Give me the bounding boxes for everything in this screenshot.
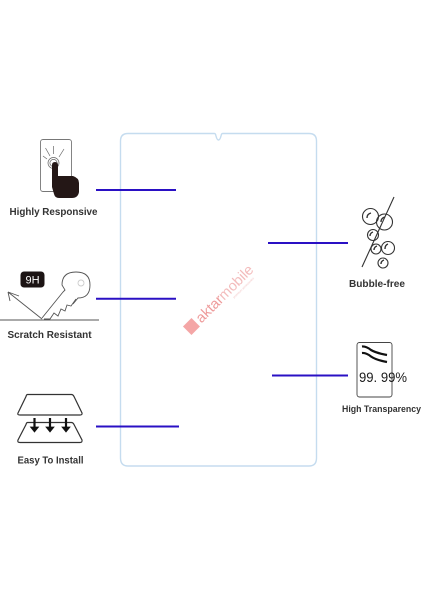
- icon: transparency card: 99. 99%: [359, 369, 407, 385]
- watermark: aktarmobile: premium accessories: [232, 276, 255, 299]
- label: scratch resistant: Scratch Resistant: [8, 330, 92, 341]
- connector line: scratch resistant: [96, 298, 176, 300]
- label: easy to install: Easy To Install: [18, 456, 84, 466]
- icon: 9H badge: 9H: [25, 274, 40, 286]
- connector line: easy to install: [96, 426, 179, 428]
- connector line: high transparency: [272, 374, 348, 376]
- connector line: highly responsive: [96, 189, 176, 191]
- connector line: bubble-free: [268, 242, 348, 244]
- label: highly responsive: Highly Responsive: [10, 207, 98, 218]
- icon: scratch arrow and key: [0, 272, 99, 320]
- icon: install layers: [18, 394, 82, 442]
- icon: transparency card: [357, 342, 407, 397]
- icon: bubbles with diagonal line: [362, 197, 394, 268]
- watermark: aktarmobile: aktarmobile: [193, 262, 257, 326]
- icon: touch finger on phone: [40, 140, 79, 198]
- label: bubble-free: Bubble-free: [349, 279, 405, 290]
- label: high transparency: High Transparency: [342, 404, 422, 414]
- tablet screen protector outline: [120, 134, 316, 466]
- icon: 9H badge: [20, 272, 44, 288]
